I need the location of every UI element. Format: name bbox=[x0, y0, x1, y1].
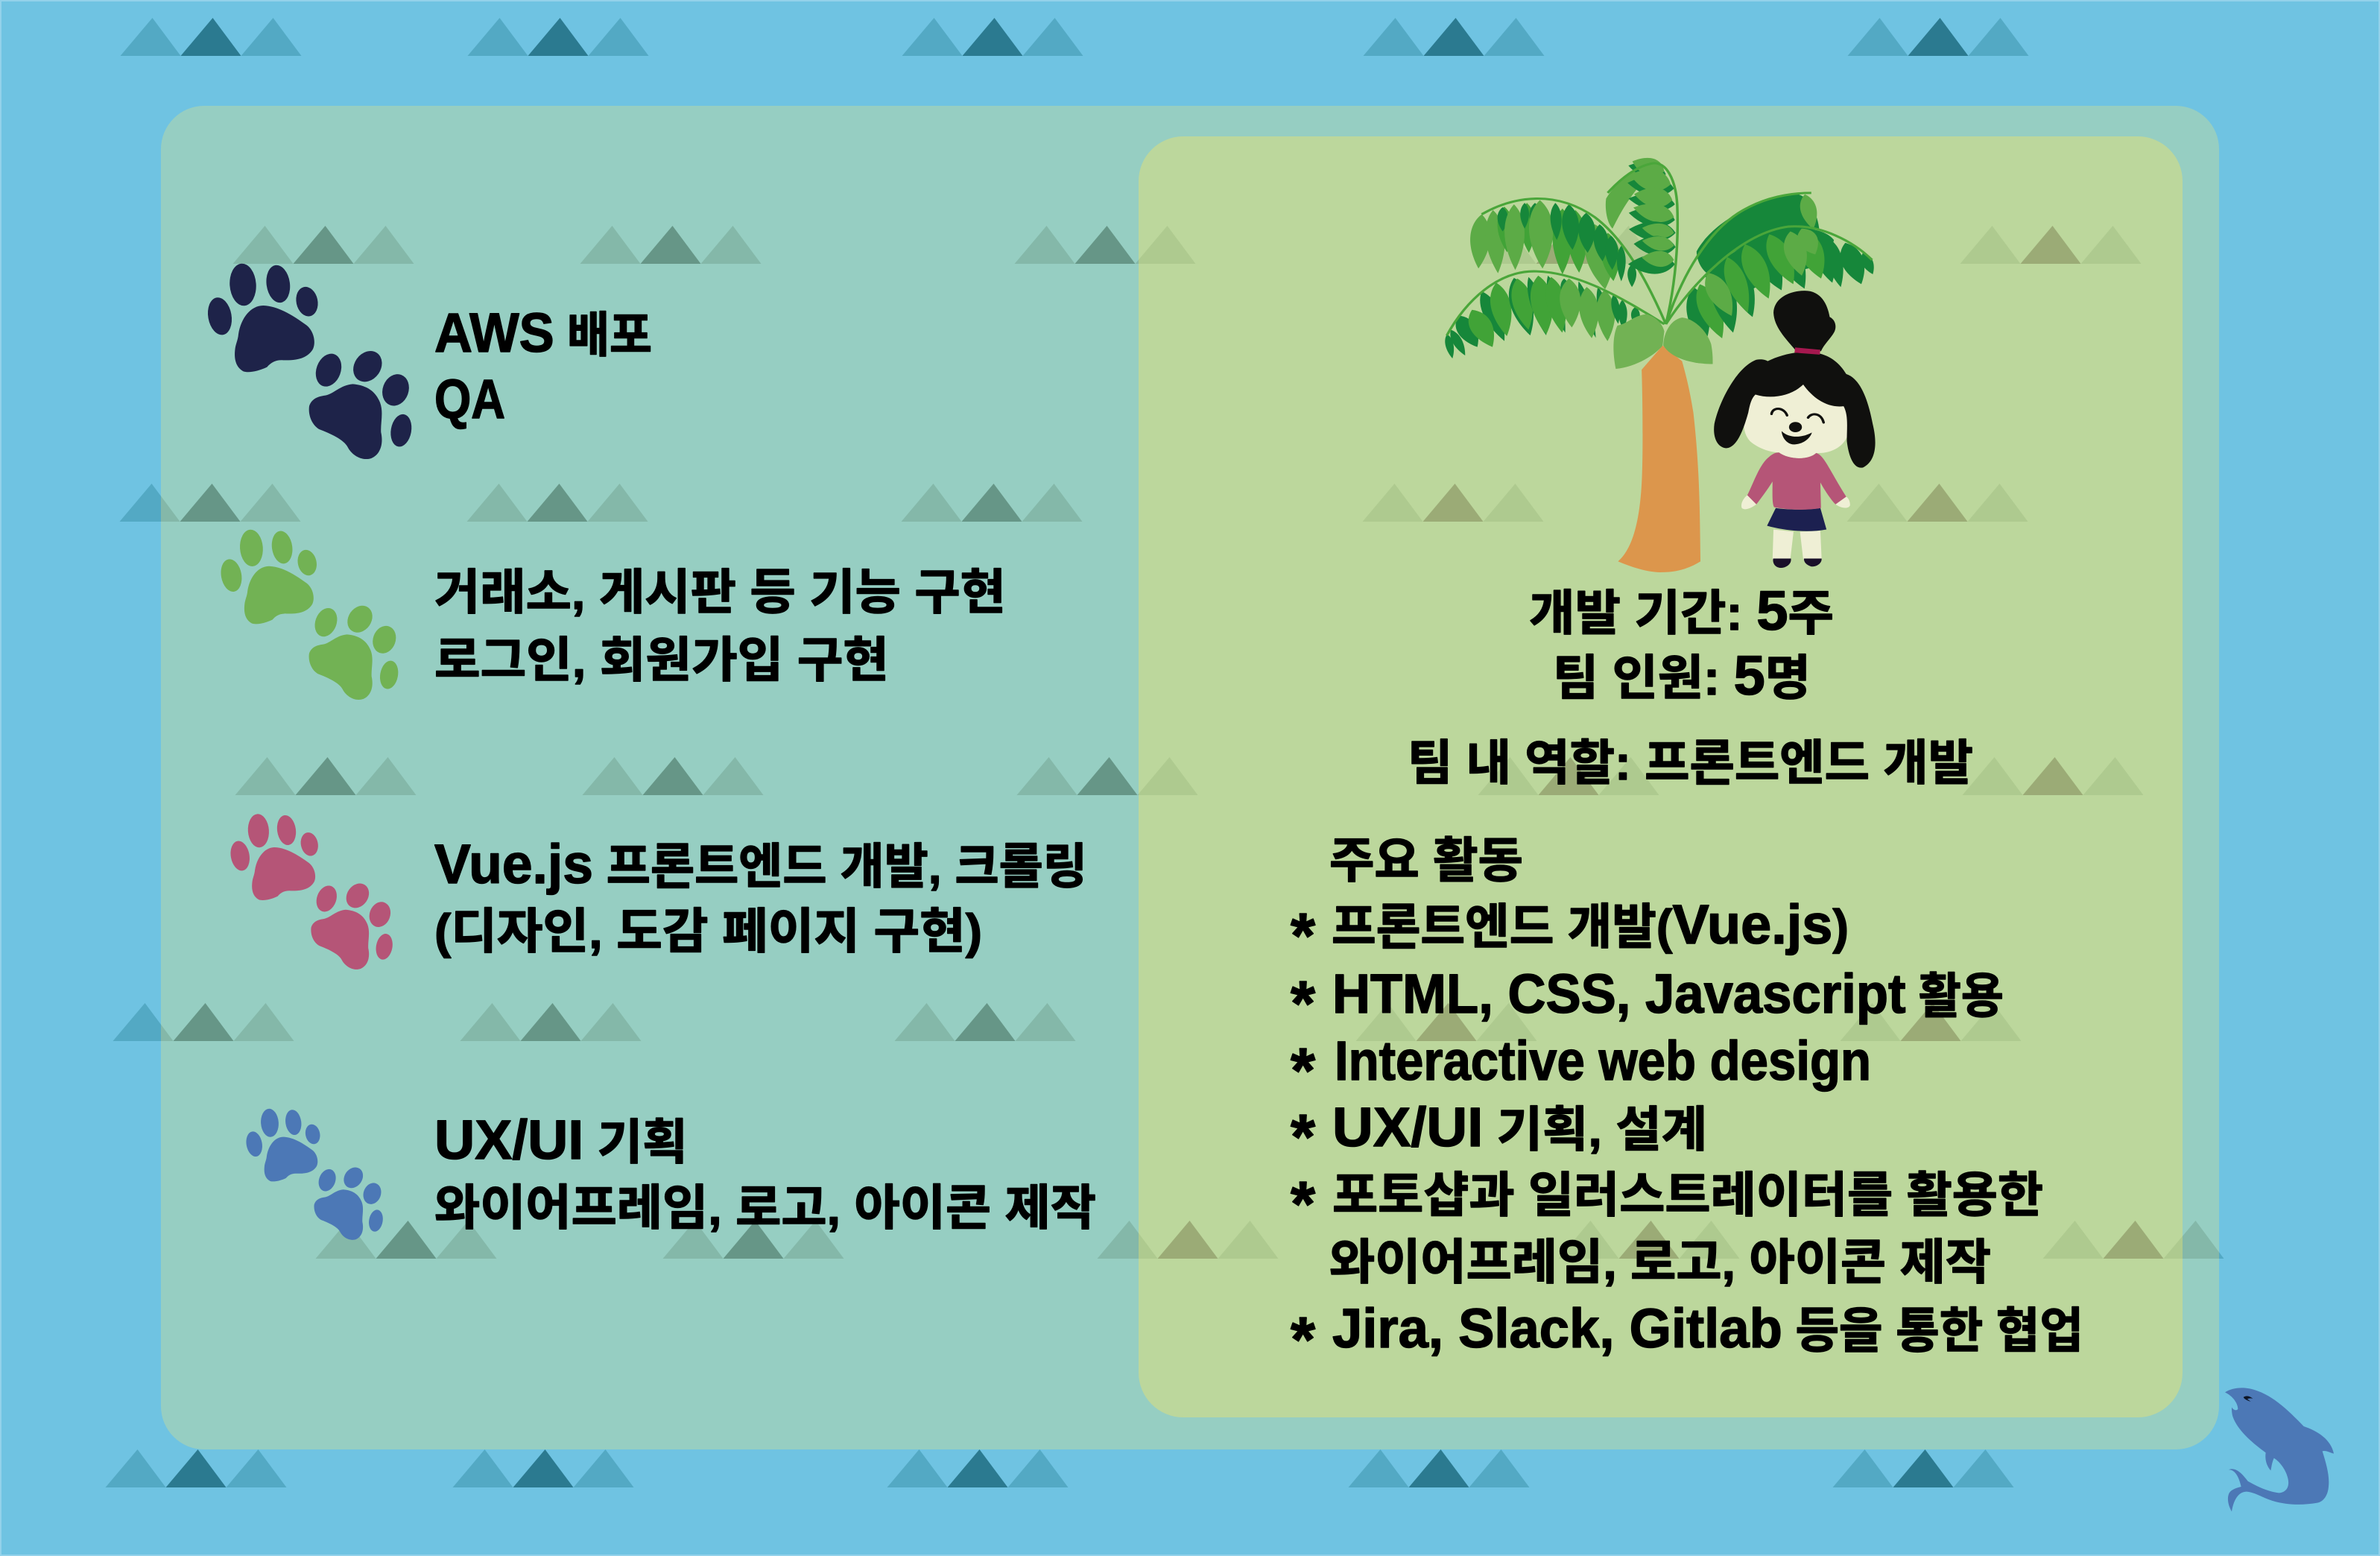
triangle pattern on outer panel bbox=[161, 176, 2219, 1259]
bullet list: main activities: * bbox=[1291, 969, 1315, 1040]
text: feature implementation bbox=[434, 565, 1006, 687]
bullet list: main activities: * bbox=[1291, 1305, 1315, 1376]
legs bbox=[1773, 529, 1822, 560]
icon: green paw prints bbox=[218, 529, 400, 700]
text: frontend development bbox=[434, 833, 1087, 958]
bullet list: main activities: Interactive web design bbox=[1335, 1030, 1871, 1092]
bullet list: main activities: UX/UI 기획, 설계 bbox=[1332, 1096, 1707, 1158]
triangle pattern on inner panel bbox=[1139, 158, 2183, 1259]
text: project summary bbox=[1408, 580, 1973, 790]
text: project summary: 팀 내 역할: 프론트엔드 개발 bbox=[1408, 736, 1973, 790]
icon: palm tree bbox=[1443, 153, 1878, 572]
bullet list: main activities: * bbox=[1291, 901, 1315, 972]
text: feature implementation: 거래소, 게시판 등 기능 구현 bbox=[434, 565, 1006, 619]
frond: upper right bbox=[1666, 193, 1821, 324]
bullet list: main activities: HTML, CSS, Javascript 활용 bbox=[1332, 963, 2004, 1025]
text: frontend development: (디자인, 도감 페이지 구현) bbox=[434, 904, 982, 958]
panel: inner green bbox=[1139, 136, 2183, 1417]
text: project summary: 팀 인원: 5명 bbox=[1553, 645, 1811, 706]
nose bbox=[1789, 422, 1802, 432]
text: main activities heading: 주요 활동 bbox=[1329, 833, 1523, 888]
mouth bbox=[1782, 431, 1812, 444]
bullet list: main activities: Jira, Slack, Gitlab 등을 통한 협업 bbox=[1332, 1297, 2083, 1359]
frond: upper left bbox=[1469, 199, 1666, 324]
bullet list: main activities: 프론트엔드 개발(Vue.js) bbox=[1332, 894, 1849, 955]
text: deployment: AWS 배포 bbox=[434, 302, 652, 364]
text: deployment: QA bbox=[434, 368, 505, 430]
icon: girl character bbox=[1714, 291, 1876, 568]
bullet list: main activities: * bbox=[1291, 1169, 1315, 1240]
eyes bbox=[1771, 409, 1823, 423]
crown leaves bbox=[1613, 314, 1713, 369]
hair bun bbox=[1773, 291, 1835, 351]
text: deployment bbox=[434, 302, 652, 430]
frond: top bbox=[1606, 153, 1677, 324]
bullet list: main activities: 포토샵과 일러스트레이터를 활용한 bbox=[1332, 1168, 2043, 1222]
text: UX UI planning: 와이어프레임, 로고, 아이콘 제작 bbox=[434, 1180, 1096, 1235]
sweater bbox=[1747, 452, 1846, 510]
text: frontend development: Vue.js 프론트엔드 개발, 크롤링 bbox=[434, 833, 1087, 895]
bullet list: main activities: 와이어프레임, 로고, 아이콘 제작 bbox=[1329, 1235, 1991, 1289]
icon: pink paw prints bbox=[228, 813, 394, 970]
icon: blue paw prints bbox=[244, 1108, 384, 1240]
icon: navy paw prints bbox=[205, 263, 414, 459]
skirt bbox=[1767, 508, 1826, 531]
tree trunk bbox=[1618, 346, 1700, 572]
bullet list: main activities: * bbox=[1291, 1036, 1315, 1107]
text: feature implementation: 로그인, 회원가입 구현 bbox=[434, 633, 889, 687]
panel: outer teal bbox=[161, 106, 2219, 1449]
hair bbox=[1714, 352, 1876, 468]
face bbox=[1744, 381, 1849, 458]
icon: blue fish bbox=[2225, 1388, 2334, 1511]
text: project summary: 개발 기간: 5주 bbox=[1529, 580, 1834, 642]
text: UX UI planning: UX/UI 기획 bbox=[434, 1109, 688, 1171]
text: UX UI planning bbox=[434, 1109, 1096, 1235]
frond: lower right bbox=[1666, 225, 1878, 349]
bullet list: main activities bbox=[1291, 894, 2083, 1376]
hair band bbox=[1794, 347, 1820, 355]
hands bbox=[1741, 496, 1850, 509]
bullet list: main activities: * bbox=[1291, 1102, 1315, 1173]
frond: lower left bbox=[1443, 271, 1664, 359]
shoes bbox=[1773, 559, 1822, 568]
